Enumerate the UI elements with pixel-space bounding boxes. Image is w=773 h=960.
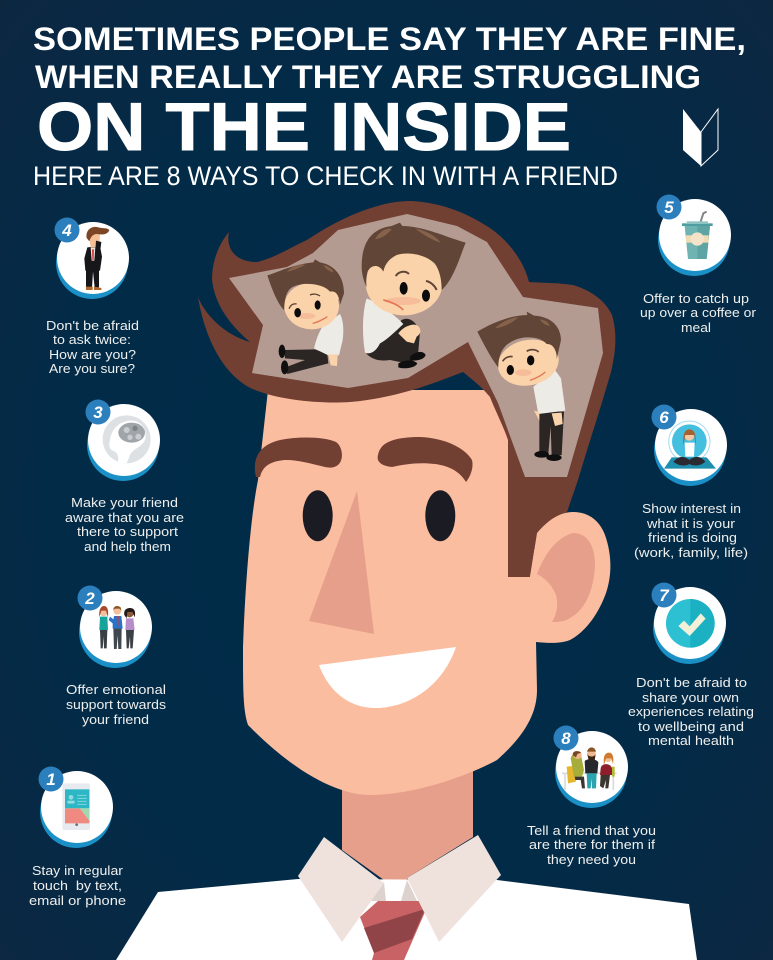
number badge: 2	[84, 589, 95, 608]
text block: Are you sure?	[49, 361, 135, 376]
number badge: 4	[61, 221, 72, 240]
text block: experiences relating	[628, 704, 754, 719]
panel: tip 3	[65, 400, 184, 554]
hair	[198, 201, 615, 577]
icon: logo shield	[683, 109, 718, 166]
number badge: 3	[93, 403, 103, 422]
text block: up over a coffee or	[640, 305, 757, 320]
text block	[640, 291, 757, 335]
eyebrows	[255, 437, 473, 482]
heading line 1: SOMETIMES PEOPLE SAY THEY ARE FINE,	[33, 21, 746, 57]
text block: are there for them if	[529, 837, 655, 852]
text block: there to support	[77, 524, 178, 539]
text block: to ask twice:	[53, 332, 131, 347]
eyes	[303, 490, 455, 541]
figure: hugging knees	[362, 223, 466, 368]
illustration: man with head open	[116, 201, 697, 960]
icon: three friends	[99, 606, 135, 649]
text block	[634, 501, 748, 560]
icon: check mark	[666, 599, 715, 648]
neck	[342, 770, 473, 902]
text block: touch by text,	[33, 878, 122, 893]
text block: email or phone	[29, 893, 126, 908]
title block	[33, 21, 746, 191]
number badge: 6	[659, 408, 669, 427]
nose	[309, 491, 374, 634]
text block: and help them	[84, 539, 171, 554]
text block: share your own	[642, 690, 739, 705]
number badge	[652, 404, 676, 430]
collar	[298, 835, 501, 942]
icon: head with brain	[103, 415, 151, 463]
heading line 3: ON THE INSIDE	[37, 89, 571, 165]
inside of head	[229, 214, 603, 477]
text block: Stay in regular	[32, 863, 124, 878]
collar shade	[370, 880, 417, 901]
text block: Offer emotional	[66, 682, 166, 697]
icon disc	[658, 199, 731, 276]
text block: Don't be afraid	[46, 318, 139, 333]
text block: friend is doing	[648, 530, 737, 545]
panel: tip 7	[628, 582, 754, 748]
panel: tip 6	[634, 404, 748, 560]
text block	[29, 863, 126, 908]
mouth	[319, 647, 456, 708]
number badge: 7	[659, 586, 670, 605]
text block: what it is your	[646, 516, 736, 531]
icon disc	[555, 731, 628, 808]
icon: coffee cup	[682, 212, 713, 259]
inner ear	[537, 533, 595, 622]
text block	[66, 682, 167, 727]
number badge: 8	[561, 729, 571, 748]
text block: Offer to catch up	[643, 291, 749, 306]
icon: friends talking	[562, 747, 617, 790]
panel: tip 2	[66, 586, 167, 727]
shirt	[116, 879, 697, 960]
heading line 2: WHEN REALLY THEY ARE STRUGGLING	[35, 59, 701, 95]
icon disc	[56, 222, 129, 299]
icon disc	[653, 587, 726, 664]
panel: tip 5	[640, 194, 757, 335]
face	[243, 390, 537, 795]
icon: phone	[62, 783, 90, 830]
number badge	[652, 582, 676, 608]
ear	[528, 512, 610, 643]
number badge	[54, 218, 80, 242]
icon: meditating woman	[664, 421, 716, 469]
text block	[628, 675, 754, 748]
icon disc	[654, 409, 727, 486]
number badge: 1	[46, 770, 56, 789]
icon disc	[79, 591, 152, 668]
text block: Show interest in	[642, 501, 741, 516]
small sad figures inside head	[267, 223, 565, 461]
number badge	[86, 400, 110, 424]
panel: tip 8	[527, 726, 656, 867]
panel: tip 1	[29, 766, 126, 908]
text block: aware that you are	[65, 510, 184, 525]
tie	[360, 901, 425, 960]
icon disc	[87, 404, 160, 481]
text block	[46, 318, 139, 376]
text block: support towards	[66, 697, 167, 712]
text block: How are you?	[49, 347, 136, 362]
figure: sitting with legs out	[267, 259, 344, 374]
text block: mental health	[648, 733, 734, 748]
text block: meal	[681, 320, 711, 335]
figure: standing head down	[477, 312, 565, 461]
number badge	[78, 586, 102, 610]
subtitle: HERE ARE 8 WAYS TO CHECK IN WITH A FRIEND	[33, 161, 618, 191]
number badge	[656, 194, 682, 220]
text block	[65, 495, 184, 554]
text block: Tell a friend that you	[527, 823, 656, 838]
text block: your friend	[82, 712, 149, 727]
icon: thinking man	[84, 227, 109, 290]
text block: Don't be afraid to	[636, 675, 747, 690]
text block: (work, family, life)	[634, 545, 748, 560]
text block: they need you	[547, 852, 636, 867]
panel: tip 4	[46, 218, 139, 376]
text block: Make your friend	[71, 495, 178, 510]
number badge	[554, 726, 578, 750]
number badge	[38, 766, 64, 792]
text block	[527, 823, 656, 867]
icon disc	[40, 771, 113, 848]
text block: to wellbeing and	[638, 719, 744, 734]
number badge: 5	[664, 198, 674, 217]
